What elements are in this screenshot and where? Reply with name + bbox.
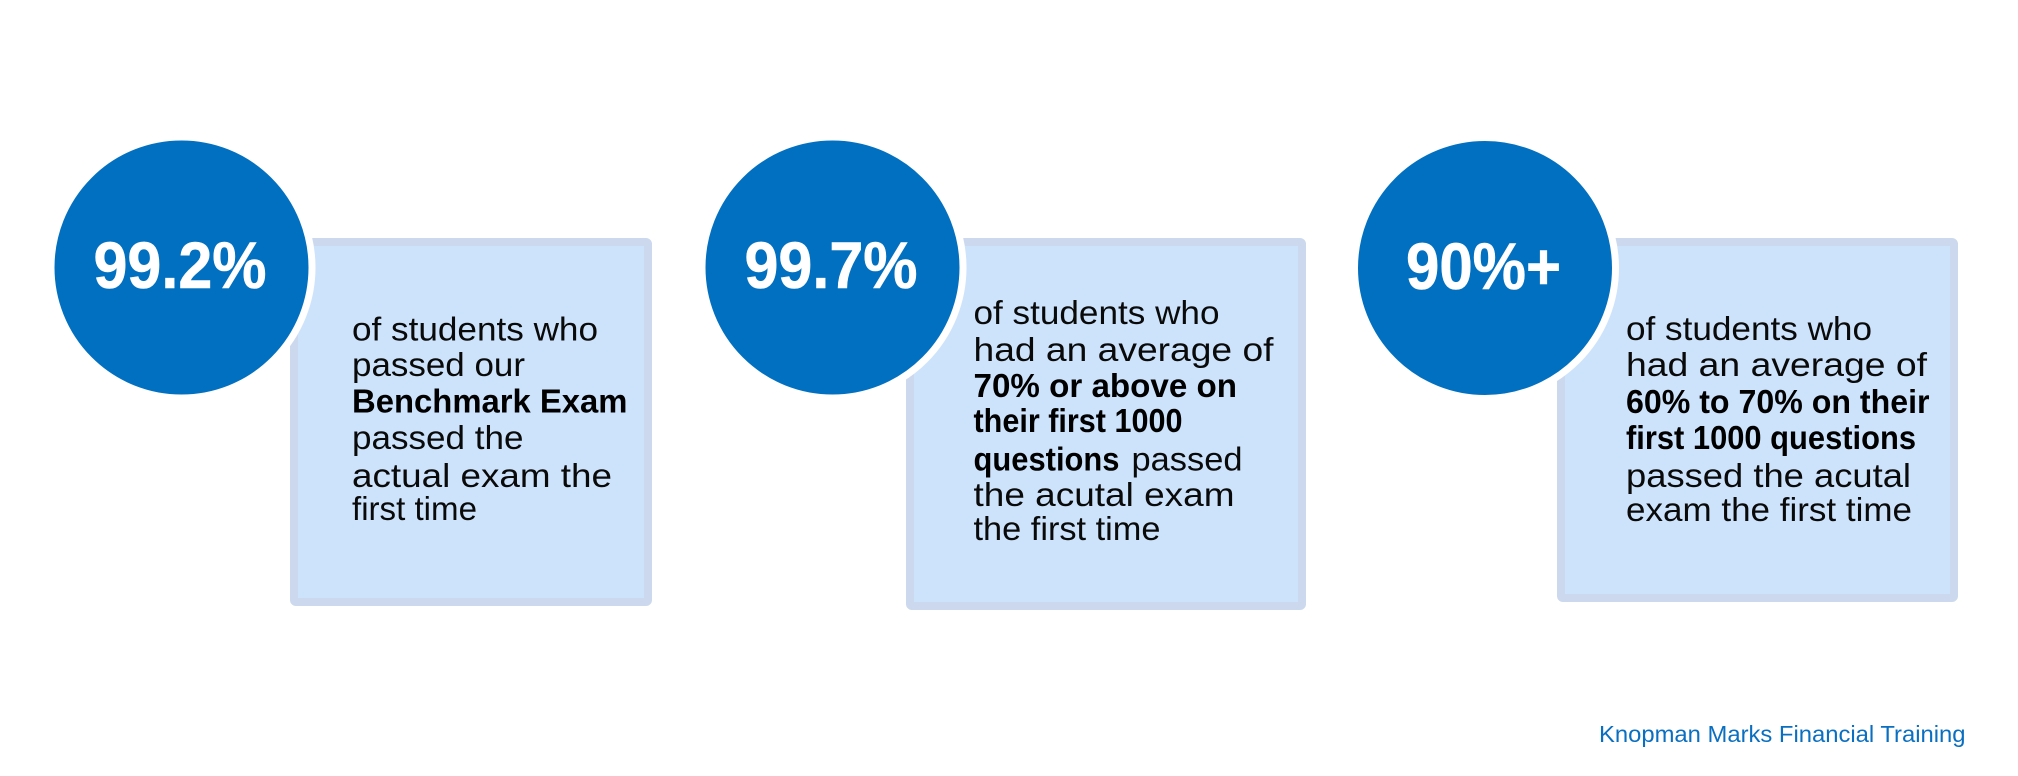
description text: passed the acutal [1626,457,1911,494]
description text: had an average of [1626,346,1928,383]
stat circle [702,137,963,398]
description text [352,310,628,527]
description text: actual exam the [352,457,612,494]
description text: their first 1000 [974,402,1182,439]
description text: passed the [352,419,524,456]
description text: exam the first time [1626,491,1912,528]
description text: the first time [974,510,1160,547]
panel background box [1561,242,1954,598]
description text: first time [352,490,477,527]
stat circle [1354,138,1616,398]
stat value 90%+: 90%+ [1406,229,1561,303]
description text: questions [974,440,1120,478]
stat value 99.7%: 99.7% [744,228,918,302]
description text: of students who [352,310,598,348]
description text: of students who [974,294,1220,331]
description text: Benchmark Exam [352,382,628,420]
description text: passed [1132,440,1242,478]
description text [1626,310,1930,528]
stat value 99.2%: 99.2% [94,228,266,302]
description text: had an average of [974,331,1274,368]
description text: the acutal exam [974,476,1234,513]
panel: 70 percent or above statistic [702,137,1302,606]
panel background box [294,242,648,602]
description text: passed our [352,346,525,383]
description text: of students who [1626,310,1872,347]
description text: 60% to 70% on their [1626,383,1930,420]
panel background box [910,242,1302,606]
footer credit: Knopman Marks Financial Training [1599,721,1966,747]
description text [974,294,1274,547]
description text: 70% or above on [974,367,1237,404]
description text: first 1000 questions [1626,419,1916,456]
stat circle [51,137,312,398]
panel: 60 to 70 percent statistic [1354,138,1954,598]
panel: benchmark exam statistic [51,137,648,602]
